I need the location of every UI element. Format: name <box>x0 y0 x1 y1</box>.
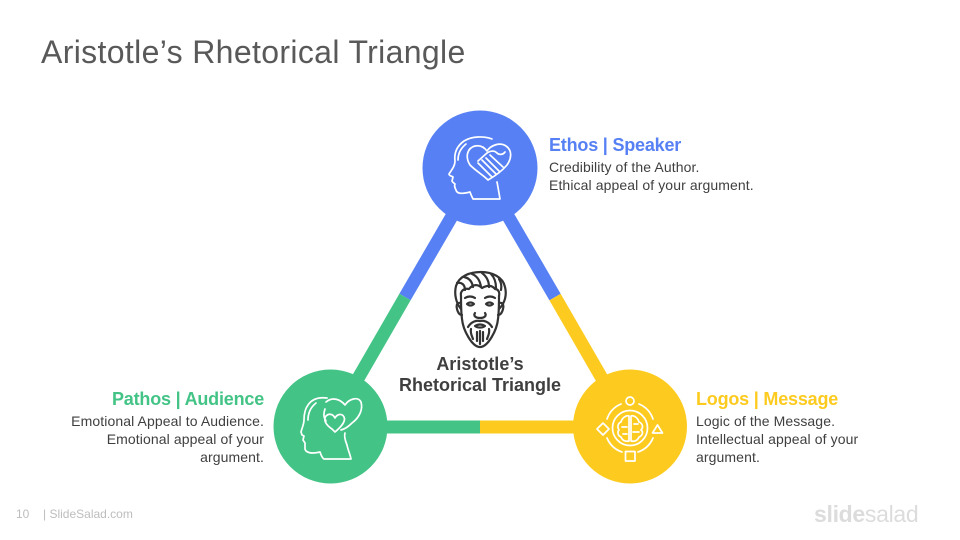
logo wordmark: slidesalad <box>814 501 918 527</box>
icon: brain with shapes <box>597 397 662 461</box>
pathos description: argument. <box>200 449 264 465</box>
center label: Aristotle’s <box>436 354 524 374</box>
center label <box>399 354 561 395</box>
ethos text <box>549 135 754 193</box>
icon: head with handshake heart <box>449 137 511 199</box>
logos description: argument. <box>696 449 760 465</box>
icon: Aristotle face <box>455 272 506 347</box>
pathos text <box>71 389 264 465</box>
logos description: Logic of the Message. <box>696 413 835 429</box>
circle: ethos <box>422 110 538 226</box>
pathos description: Emotional appeal of your <box>107 431 264 447</box>
circle: logos <box>573 370 687 484</box>
circle: pathos <box>274 370 388 484</box>
logos description <box>696 413 858 465</box>
ethos description <box>549 159 754 193</box>
ethos description: Ethical appeal of your argument. <box>549 177 754 193</box>
logos text <box>696 389 858 465</box>
pathos heading: Pathos | Audience <box>112 389 264 409</box>
ethos description: Credibility of the Author. <box>549 159 699 175</box>
logos heading: Logos | Message <box>696 389 838 409</box>
page number: 10 <box>16 507 29 521</box>
pathos description: Emotional Appeal to Audience. <box>71 413 264 429</box>
icon: head with hearts <box>301 398 362 459</box>
pathos description <box>71 413 264 465</box>
ethos heading: Ethos | Speaker <box>549 135 681 155</box>
footer site: | SlideSalad.com <box>43 507 133 521</box>
logos description: Intellectual appeal of your <box>696 431 858 447</box>
center label: Rhetorical Triangle <box>399 374 561 394</box>
title: Aristotle’s Rhetorical Triangle <box>41 34 466 70</box>
triangle edges <box>330 168 630 427</box>
